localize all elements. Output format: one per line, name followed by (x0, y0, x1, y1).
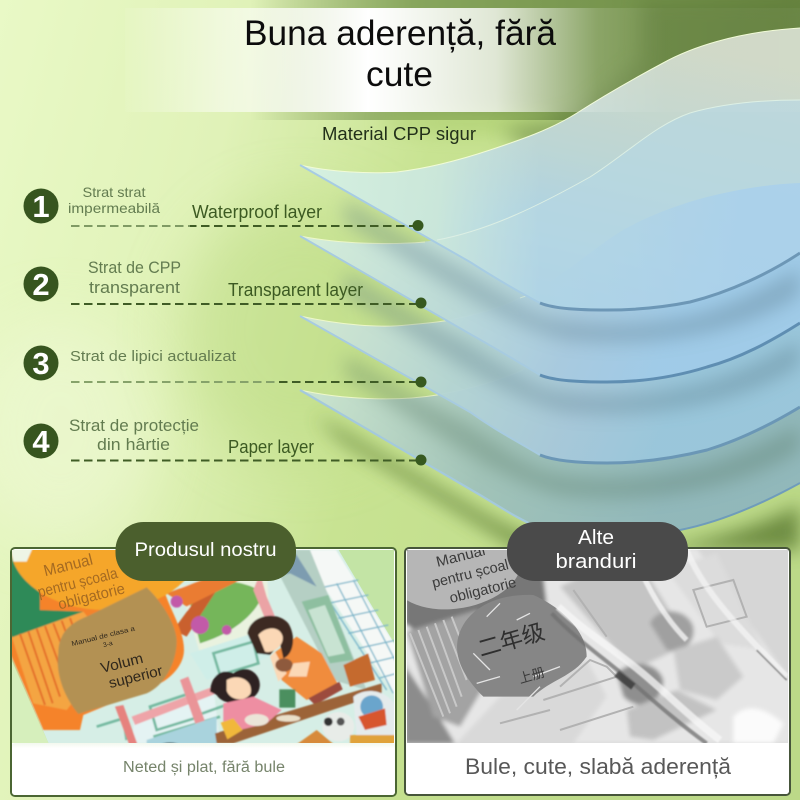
english label 2: Transparent layer (228, 280, 363, 300)
romanian label 3: Strat de lipici actualizat (70, 348, 237, 365)
panel: other brands: Bule, cute, slabă aderență (465, 754, 731, 779)
panel: our product (10, 547, 397, 797)
number badge 3: 3 (32, 346, 50, 381)
pill: our product (116, 522, 296, 581)
photo: textbook with smooth film: 3-a (102, 640, 114, 649)
shadow of sheet 2 (345, 272, 800, 413)
title (244, 14, 557, 94)
romanian label 4: din hârtie (97, 436, 170, 454)
layer label 1 (24, 184, 424, 231)
photo: textbook with wrinkled film: 二年级 (475, 618, 547, 662)
cover text: pentru școal (430, 557, 510, 592)
sheet 2: transparent layer (300, 100, 800, 382)
number badge 1 (24, 188, 58, 224)
romanian label 2: Strat de CPP (88, 259, 181, 277)
mask and animals (353, 691, 397, 737)
small girl (210, 669, 260, 703)
caption left (12, 743, 395, 795)
layer label 4 (24, 417, 426, 466)
number badge 3 (24, 346, 58, 381)
leader line 1 (71, 220, 424, 231)
photo: textbook with wrinkled film: 上册 (517, 665, 547, 686)
sheet 4: paper layer (300, 250, 800, 552)
title: Buna aderență, fără (244, 14, 557, 53)
pill: our product: Produsul nostru (134, 540, 276, 561)
grid page (310, 550, 394, 694)
layer label 2 (24, 259, 426, 308)
cover text: Manual (435, 543, 487, 571)
panel frame left (11, 548, 396, 796)
romanian label 1: Strat strat (82, 184, 146, 200)
scene walls (280, 550, 366, 690)
panel: other brands (404, 547, 791, 796)
number badge 2 (24, 266, 58, 302)
cover text: obligatorie (56, 580, 127, 613)
leader line 3 (71, 376, 426, 388)
cover text: pentru școala (36, 565, 120, 601)
english label 4: Paper layer (228, 437, 314, 457)
photo: textbook with smooth film: superior (107, 663, 165, 692)
romanian label 4 (69, 417, 199, 454)
number badge 1: 1 (32, 189, 50, 224)
romanian label 2: transparent (89, 279, 180, 297)
number badge 4: 4 (32, 424, 50, 459)
pill: other brands: Alte (578, 527, 614, 549)
photo: textbook with smooth film (12, 550, 394, 743)
pill: other brands (507, 522, 688, 581)
romanian label 1: impermeabilă (68, 200, 160, 216)
pill: other brands: branduri (556, 551, 636, 573)
title banner (125, 8, 800, 112)
tall girl (273, 637, 338, 700)
number badge 2: 2 (32, 267, 50, 302)
photo: textbook with smooth film: Volum (99, 651, 145, 677)
layer label 3 (24, 346, 426, 388)
number badge 4 (24, 424, 58, 459)
shadow of sheet 1 (345, 200, 800, 342)
sheet 3: adhesive layer (300, 183, 800, 463)
panel frame right (405, 548, 790, 795)
romanian label 2 (88, 259, 181, 297)
layered film sheets (300, 28, 800, 552)
panel: our product: Neted și plat, fără bule (123, 759, 285, 776)
sheet 1: waterproof layer (300, 28, 800, 330)
shadow of sheet 3 (345, 355, 800, 498)
title: cute (366, 55, 433, 94)
cover text: Manual (42, 552, 95, 580)
table (215, 683, 382, 743)
photo: textbook with smooth film: Manual de clasa a (71, 626, 136, 648)
cover text (38, 553, 124, 609)
book scene base (10, 547, 400, 747)
romanian label 1 (68, 184, 160, 216)
cover (12, 592, 185, 731)
leader line 2 (71, 298, 426, 308)
cover text: obligatorie (448, 575, 518, 607)
romanian label 4: Strat de protecție (69, 417, 199, 435)
cover text (432, 550, 516, 602)
english label 1: Waterproof layer (192, 202, 322, 222)
caption right (406, 743, 789, 794)
photo: textbook with wrinkled film (407, 550, 788, 743)
subtitle: Material CPP sigur (322, 124, 476, 144)
leader line 4 (71, 454, 426, 466)
